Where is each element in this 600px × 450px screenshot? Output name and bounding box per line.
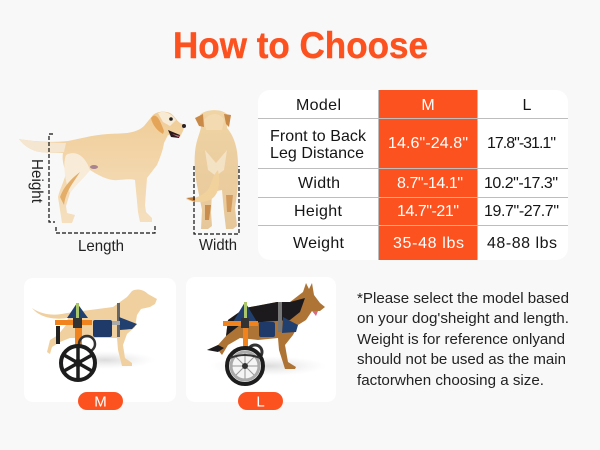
L column values: 17.8"-31.1" xyxy=(487,135,556,152)
M column highlight xyxy=(379,90,477,260)
L column values: L xyxy=(523,97,532,114)
row labels: Leg Distance xyxy=(270,145,364,162)
note text: should not be used as the main xyxy=(357,351,566,368)
M column values: M xyxy=(421,97,435,114)
M column values: 14.6"-24.8" xyxy=(388,135,468,152)
row labels: Width xyxy=(298,175,340,192)
row labels: Front to Back xyxy=(270,128,367,145)
icon: shepherd dog xyxy=(207,283,325,369)
note text: Weight is for reference onlyand xyxy=(357,331,565,348)
icon: rear view dog xyxy=(186,110,238,229)
M column values: 14.7"-21" xyxy=(397,203,459,220)
label L xyxy=(238,392,283,410)
icon: wheelchair M xyxy=(55,303,137,380)
panel: model L photo xyxy=(186,277,336,402)
icon: wheelchair L xyxy=(223,302,298,384)
side view dog with height and length dimensions xyxy=(19,112,186,255)
panel: size table xyxy=(258,90,568,260)
note text: on your dog'sheight and length. xyxy=(357,310,569,327)
L column values: 10.2"-17.3" xyxy=(484,175,558,192)
width dimension line xyxy=(194,166,239,234)
label M xyxy=(78,392,123,410)
row labels xyxy=(270,97,367,252)
height label: Height xyxy=(28,159,45,204)
icon: side view dog xyxy=(19,112,186,223)
row labels: Weight xyxy=(293,235,345,252)
width label: Width xyxy=(199,237,237,254)
height dimension line xyxy=(49,134,55,222)
table background xyxy=(258,90,568,260)
rear view dog with width dimension xyxy=(186,110,239,254)
M column values xyxy=(388,97,468,252)
label L: L xyxy=(256,394,265,410)
M column values: 8.7"-14.1" xyxy=(397,175,463,192)
note text: factorwhen choosing a size. xyxy=(357,372,544,389)
L column values: 48-88 lbs xyxy=(487,235,557,252)
icon: yellow dog xyxy=(32,290,157,366)
L column values: 19.7"-27.7" xyxy=(484,203,559,220)
length dimension line xyxy=(56,224,155,233)
M column values: 35-48 lbs xyxy=(393,235,464,252)
panel: model M photo xyxy=(24,278,176,402)
row labels: Height xyxy=(294,203,343,220)
note text: *Please select the model based xyxy=(357,290,569,307)
row labels: Model xyxy=(296,97,341,114)
label M: M xyxy=(94,394,107,410)
note text xyxy=(357,290,569,389)
L column values xyxy=(484,97,559,252)
length label: Length xyxy=(78,238,124,255)
title: How to Choose xyxy=(173,25,428,66)
